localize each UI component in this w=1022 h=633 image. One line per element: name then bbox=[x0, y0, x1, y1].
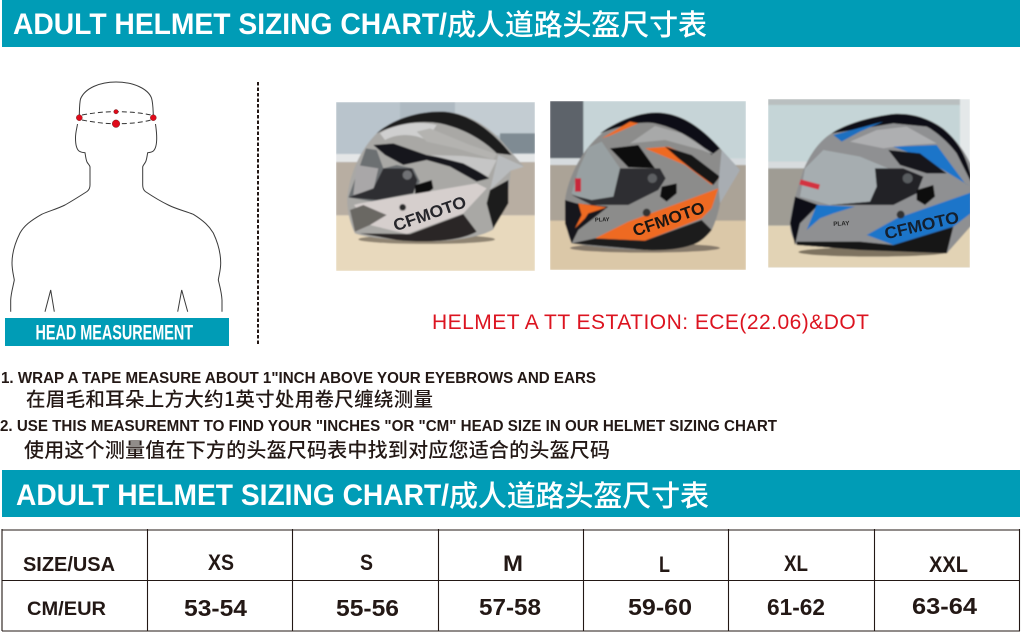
row: size/usa: XXL bbox=[929, 552, 968, 577]
row: size/usa: S bbox=[360, 550, 373, 575]
row: size/usa: L bbox=[659, 552, 670, 577]
row: cm/eur: 57-58 bbox=[479, 594, 541, 620]
photo: silver helmet bbox=[336, 102, 535, 271]
top title banner: ADULT HELMET SIZING CHART/ bbox=[13, 8, 448, 41]
dashed vertical divider bbox=[257, 82, 259, 345]
helmet attestation text: HELMET A TT ESTATION: ECE(22.06)&DOT bbox=[432, 311, 869, 334]
helmet logo: CFMOTO bbox=[630, 198, 707, 240]
row: cm/eur: 63-64 bbox=[912, 593, 977, 619]
step 2 english: 2. USE THIS MEASUREMNT TO FIND YOUR "INCHES "OR "CM" HEAD SIZE IN OUR HELMET SIZING CHART bbox=[0, 418, 777, 435]
step 2 chinese: 使用这个测量值在下方的头盔尺码表中找到对应您适合的头盔尺码 bbox=[24, 434, 610, 463]
body outline bbox=[11, 82, 222, 312]
helmet slogan: PLAY bbox=[595, 217, 610, 224]
row: cm/eur: 53-54 bbox=[184, 595, 247, 621]
photo: orange helmet bbox=[550, 101, 746, 270]
tape measure dashed loop bbox=[82, 112, 151, 124]
row: size/usa: XL bbox=[784, 551, 808, 576]
step 1 chinese: 在眉毛和耳朵上方大约1英寸处用卷尺缠绕测量 bbox=[26, 383, 433, 412]
row: cm/eur: 61-62 bbox=[767, 594, 825, 620]
row: cm/eur: CM/EUR bbox=[27, 599, 106, 620]
panel: head measurement diagram bbox=[11, 82, 222, 312]
second title banner: ADULT HELMET SIZING CHART/ bbox=[16, 479, 450, 512]
row: size/usa bbox=[23, 550, 968, 577]
row: size/usa: M bbox=[503, 551, 523, 576]
instructions bbox=[0, 370, 777, 463]
helmet logo: CFMOTO bbox=[391, 192, 469, 235]
row: cm/eur bbox=[27, 593, 977, 621]
second title banner: 成人道路头盔尺寸表 bbox=[449, 473, 709, 515]
row: size/usa: XS bbox=[208, 550, 234, 575]
measurement points bbox=[76, 110, 156, 127]
row: cm/eur: 59-60 bbox=[628, 594, 692, 620]
helmet slogan: PLAY bbox=[833, 220, 850, 228]
head measurement label: HEAD MEASUREMENT bbox=[36, 322, 193, 344]
second title banner bbox=[2, 470, 1020, 517]
size table bbox=[2, 529, 1020, 631]
head measurement label bbox=[5, 318, 229, 346]
row: cm/eur: 55-56 bbox=[336, 595, 399, 621]
step 1 english: 1. WRAP A TAPE MEASURE ABOUT 1"INCH ABOVE YOUR EYEBROWS AND EARS bbox=[1, 370, 596, 387]
photo: blue helmet bbox=[768, 99, 973, 268]
top title banner bbox=[2, 0, 1020, 47]
row: size/usa: SIZE/USA bbox=[23, 554, 115, 576]
helmet logo: CFMOTO bbox=[883, 208, 961, 243]
top title banner: 成人道路头盔尺寸表 bbox=[447, 2, 707, 44]
